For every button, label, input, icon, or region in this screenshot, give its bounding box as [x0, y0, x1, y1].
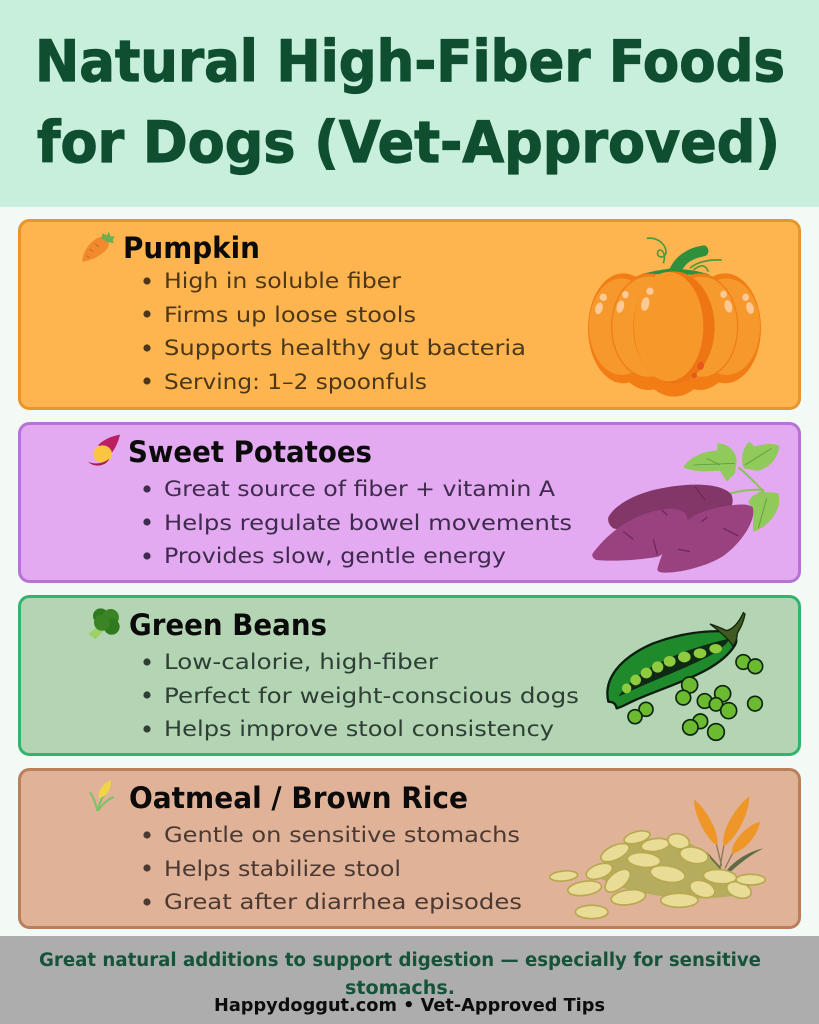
- heading: Sweet Potatoes: Sweet Potatoes: [128, 435, 372, 469]
- bullet list: pumpkin: Firms up loose stools: [164, 303, 416, 327]
- illustration: oats and wheat: [549, 797, 765, 919]
- bullet list: oatmeal: [143, 823, 522, 914]
- footer band: [0, 936, 819, 1024]
- bullet list: pumpkin: Supports healthy gut bacteria: [164, 336, 526, 360]
- bullet list: oatmeal: Great after diarrhea episodes: [164, 890, 522, 914]
- bullet list: sweet potatoes: [143, 477, 572, 568]
- bullet list: green beans: Perfect for weight-conscious dogs: [164, 684, 579, 708]
- panel: pumpkin: [20, 220, 800, 408]
- panel: green beans: [20, 596, 800, 754]
- title line 2: for Dogs (Vet-Approved): [37, 110, 780, 176]
- bullet list: oatmeal: Gentle on sensitive stomachs: [164, 823, 520, 847]
- illustration: pea pod and peas: [607, 613, 763, 740]
- bullet list: green beans: [143, 650, 579, 741]
- bullet list: green beans: Low-calorie, high-fiber: [164, 650, 438, 674]
- illustration: sweet potatoes with leaves: [592, 442, 779, 573]
- bullet list: oatmeal: Helps stabilize stool: [164, 857, 401, 881]
- footer message: [39, 950, 761, 999]
- icon: broccoli: [88, 608, 120, 639]
- panel: oatmeal and brown rice: [20, 770, 800, 928]
- panel: sweet potatoes: [20, 424, 800, 582]
- bullet list: sweet potatoes: Great source of fiber + vitamin A: [164, 477, 556, 501]
- header band with title: [0, 0, 819, 207]
- bullet list: green beans: Helps improve stool consistency: [164, 717, 554, 741]
- icon: grain stalk: [90, 780, 114, 811]
- bullet list: pumpkin: Serving: 1–2 spoonfuls: [164, 370, 427, 394]
- icon: carrot: [82, 232, 115, 262]
- footer site credit: Happydoggut.com • Vet-Approved Tips: [214, 995, 605, 1016]
- bullet list: sweet potatoes: Provides slow, gentle energy: [164, 544, 506, 568]
- illustration: pumpkin: [588, 238, 761, 397]
- footer message: Great natural additions to support digestion — especially for sensitive: [39, 950, 761, 971]
- title line 1: Natural High-Fiber Foods: [35, 29, 785, 95]
- heading: Pumpkin: Pumpkin: [123, 231, 260, 265]
- heading: Green Beans: Green Beans: [129, 608, 327, 642]
- footer message: stomachs.: [345, 978, 455, 999]
- bullet list: pumpkin: High in soluble fiber: [164, 269, 401, 293]
- bullet list: sweet potatoes: Helps regulate bowel movements: [164, 511, 572, 535]
- heading: Oatmeal / Brown Rice: Oatmeal / Brown Rice: [129, 781, 468, 815]
- bullet list: pumpkin: [143, 269, 526, 394]
- icon: sweet potato: [88, 435, 120, 466]
